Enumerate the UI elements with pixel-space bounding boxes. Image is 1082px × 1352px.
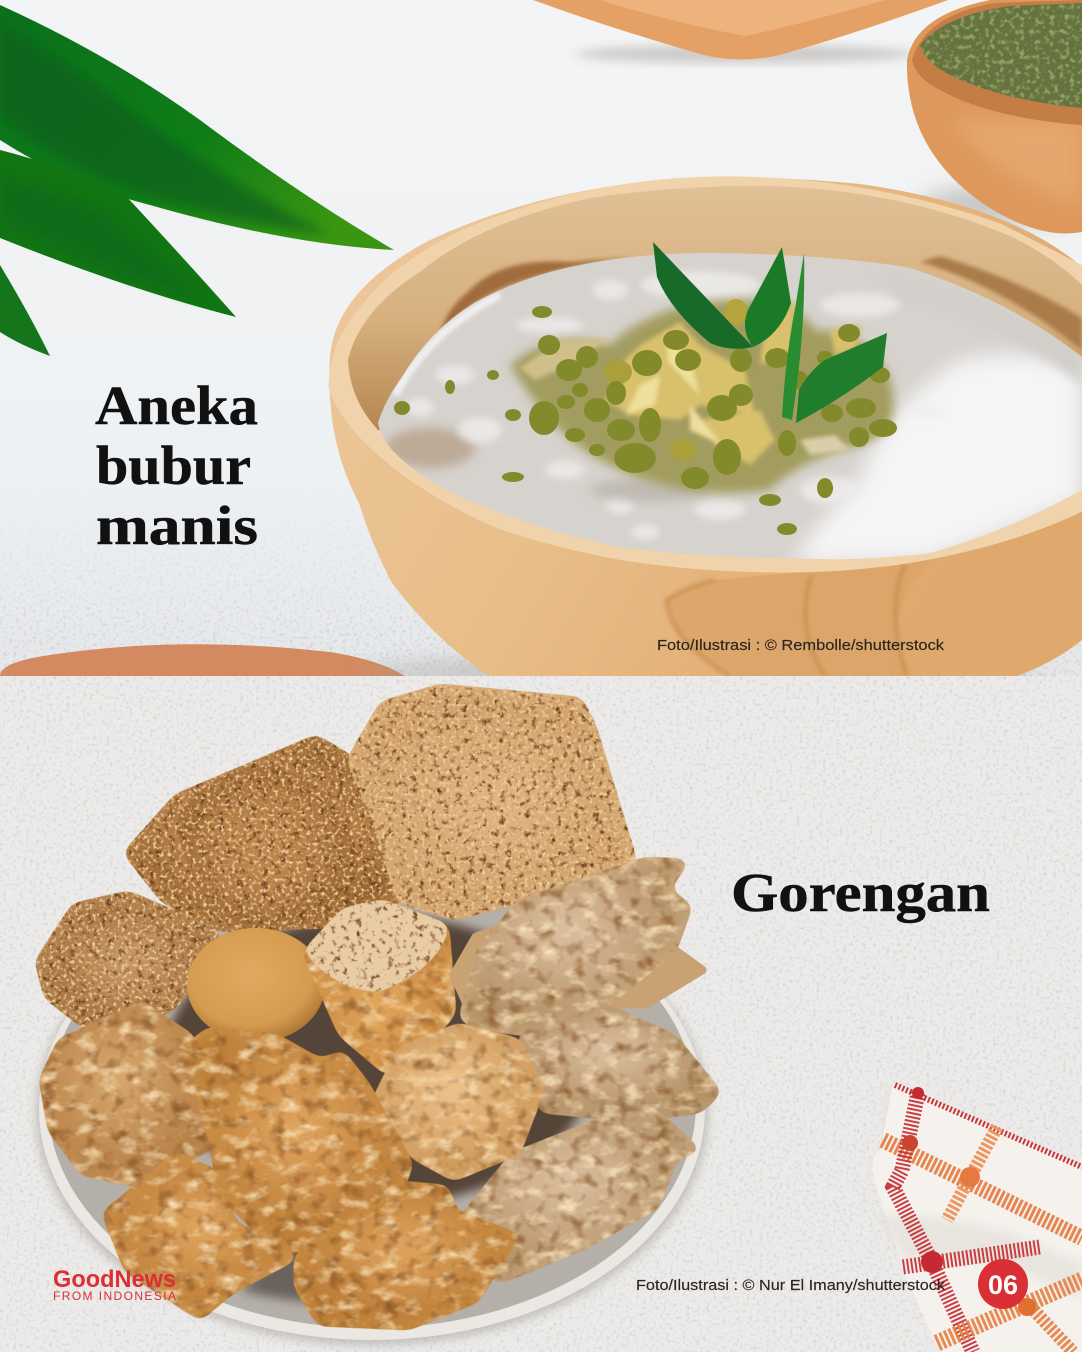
fritter: bakwan centre [186, 1031, 409, 1248]
icon: red checked napkin [872, 1083, 1082, 1352]
fritter: bakwan lower left [106, 1156, 293, 1316]
heading: aneka bubur manis [95, 385, 258, 545]
pandan garnish [653, 242, 887, 423]
fritter: samosa back [454, 928, 702, 1004]
icon: pandan leaves [0, 5, 394, 356]
wood grain [666, 568, 872, 676]
fritter: crisp tempeh [351, 688, 633, 916]
mung beans [394, 299, 897, 535]
icon: small bowl of mung beans [907, 0, 1082, 233]
panel: aneka bubur manis photo [0, 0, 1082, 686]
logo: GoodNews from Indonesia: FROM INDONESIA [53, 1289, 176, 1303]
logo: GoodNews from Indonesia: GoodNews [53, 1266, 176, 1293]
fritter: back brown [128, 739, 400, 928]
icon: big wooden bowl of bubur [329, 178, 1082, 686]
fritter: cassava [303, 899, 452, 1071]
page number badge [978, 1259, 1028, 1309]
fritter: ball [187, 928, 325, 1042]
fritter: bakwan bottom [298, 1185, 514, 1326]
logo: GoodNews from Indonesia [54, 1270, 176, 1300]
heading: gorengan: Gorengan [731, 862, 990, 923]
bowl rim lip [330, 178, 1082, 571]
fritter: tofu [43, 1006, 209, 1183]
fritter: roll lower [463, 1113, 695, 1280]
gorengan: fritters [39, 688, 717, 1326]
bowl inner wall [348, 186, 1082, 430]
icon: gray plate [36, 878, 708, 1345]
caption: top photo credit: Foto/Ilustrasi : © Rembolle/shutterstock [657, 637, 945, 654]
fritter: front crisp round [180, 768, 352, 928]
icon: plate rim at bottom [0, 644, 405, 676]
fritter: samosa [463, 861, 688, 1033]
fritter: left crisp [39, 895, 217, 1027]
caption: bottom photo credit: Foto/Ilustrasi : © Nur El Imany/shutterstock [636, 1277, 946, 1294]
bean mound [510, 300, 894, 493]
page number badge: 06 [988, 1270, 1018, 1300]
soup highlights [385, 270, 1082, 565]
heading: aneka bubur manis: bubur [96, 435, 251, 496]
ginger shreds [520, 300, 862, 465]
panel: gorengan photo [0, 676, 1082, 1352]
fritter: roll middle [521, 1008, 717, 1118]
soup [378, 253, 1082, 559]
fritter: pale roll [374, 1027, 541, 1177]
heading: aneka bubur manis: Aneka [95, 375, 258, 436]
icon: wooden cutting board [533, 0, 948, 63]
heading: aneka bubur manis: manis [96, 495, 258, 556]
